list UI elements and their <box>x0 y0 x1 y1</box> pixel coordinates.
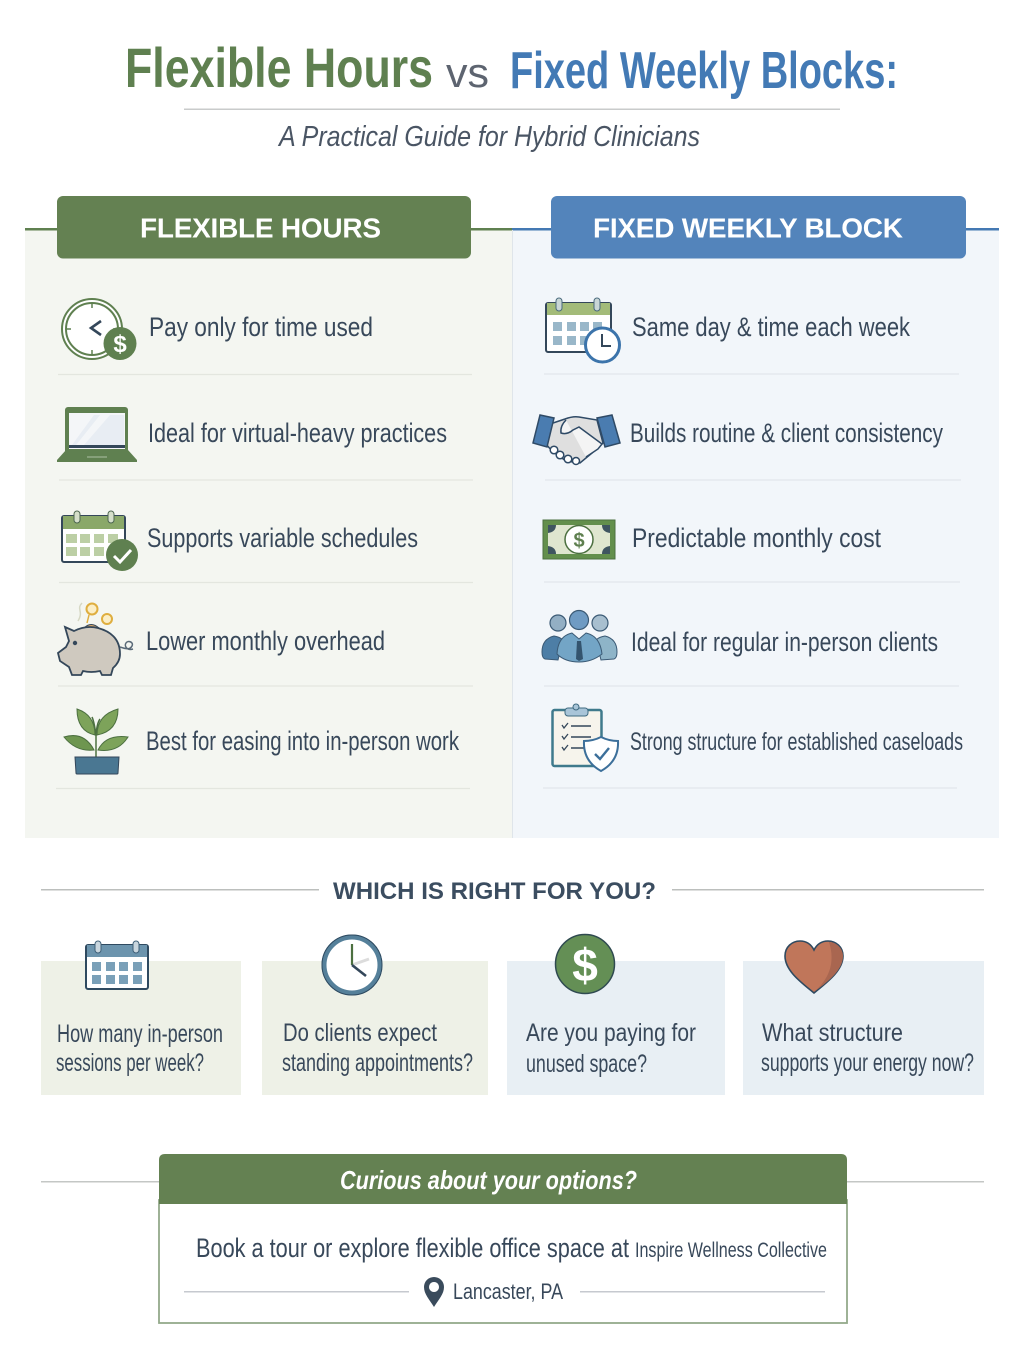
card: energy: What structure <box>762 1019 903 1047</box>
icon: piggy bank <box>58 603 133 675</box>
text: virtual: Ideal for virtual-heavy practices <box>148 418 447 448</box>
card: standing appointments <box>262 935 488 1095</box>
icon: laptop <box>57 407 137 462</box>
panel: fixed weekly block <box>512 196 999 838</box>
text: location: Lancaster, PA <box>453 1279 563 1304</box>
icon: group of people <box>542 610 617 662</box>
card: unused space <box>507 934 725 1095</box>
heading: which is right for you: WHICH IS RIGHT FOR YOU? <box>333 878 656 905</box>
icon: dollar bill <box>543 520 615 559</box>
card: in-person sessions: How many in-person <box>57 1020 223 1048</box>
icon: location pin <box>424 1277 444 1307</box>
icon: clock with dollar: $ <box>113 331 127 358</box>
heading: fixed weekly block <box>551 196 966 258</box>
card: unused space: Are you paying for <box>526 1019 696 1047</box>
card: standing appointments: standing appointments? <box>282 1049 473 1077</box>
icon: calendar with check <box>62 511 138 571</box>
icon: dollar coin <box>556 934 614 994</box>
icon: plant <box>64 709 128 774</box>
icon: clock <box>322 935 382 995</box>
callout: curious about your options <box>41 1154 984 1323</box>
text: in-person clients: Ideal for regular in-person clients <box>631 627 938 657</box>
icon: clock with dollar <box>62 299 136 360</box>
text: same day: Same day & time each week <box>632 312 910 342</box>
icon: clipboard with shield <box>552 704 618 771</box>
panel: flexible hours <box>25 196 512 838</box>
title: Flexible Hours <box>125 36 433 99</box>
title: vs <box>446 49 489 96</box>
heading: flexible hours: FLEXIBLE HOURS <box>140 212 381 244</box>
text: predictable cost: Predictable monthly cost <box>632 523 881 553</box>
subtitle: A Practical Guide for Hybrid Clinicians <box>277 121 700 153</box>
icon: calendar <box>86 941 148 989</box>
icon: heart <box>785 941 843 993</box>
icon: dollar bill: $ <box>573 530 585 552</box>
card: standing appointments: Do clients expect <box>283 1019 437 1047</box>
heading: fixed weekly block: FIXED WEEKLY BLOCK <box>593 212 903 244</box>
callout: curious about your options: Inspire Wellness Collective <box>635 1239 827 1262</box>
card: in-person sessions <box>41 941 241 1095</box>
icon: calendar with clock <box>546 298 620 362</box>
card: in-person sessions: sessions per week? <box>56 1049 204 1077</box>
callout: curious about your options: Curious about your options? <box>340 1165 637 1195</box>
text: pay only: Pay only for time used <box>149 312 373 342</box>
card: unused space: unused space? <box>526 1050 647 1078</box>
callout: curious about your options: Book a tour or explore flexible office space at <box>196 1233 629 1263</box>
icon: dollar coin: $ <box>572 939 598 991</box>
text: overhead: Lower monthly overhead <box>146 626 385 656</box>
card: energy <box>743 941 984 1095</box>
title <box>125 36 898 100</box>
text: easing: Best for easing into in-person work <box>146 726 459 756</box>
text: variable: Supports variable schedules <box>147 523 418 553</box>
heading: flexible hours <box>57 196 471 258</box>
icon: handshake <box>533 415 620 464</box>
